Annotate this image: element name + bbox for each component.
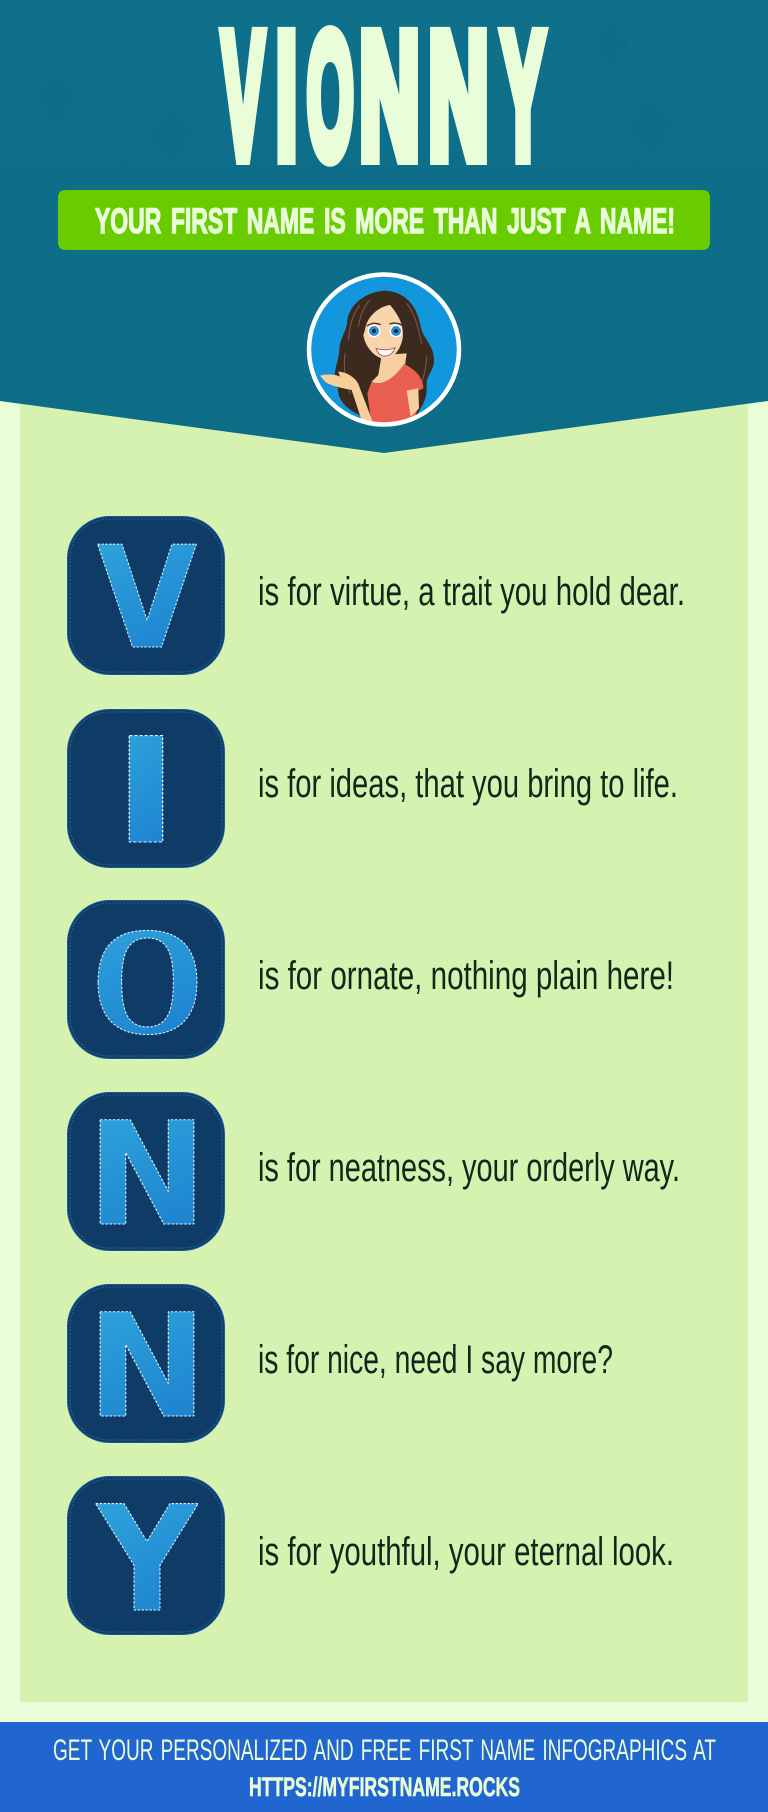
letter tile I <box>68 707 224 877</box>
letter tile Y: Y <box>95 1475 199 1645</box>
row: N second <box>68 1283 613 1450</box>
line text N second: is for nice, need I say more? <box>258 1338 613 1382</box>
portrait: woman in circle <box>309 274 459 425</box>
title: O <box>307 0 354 194</box>
letter tile I: I <box>113 707 179 877</box>
row: Y <box>68 1475 674 1645</box>
row: V <box>68 516 685 681</box>
letter tile V <box>68 516 224 681</box>
row: N <box>68 1091 680 1258</box>
letter tile N second: N <box>87 1283 207 1450</box>
panel: letters background <box>20 380 748 1702</box>
title: N <box>428 0 488 194</box>
infographic page: Y <box>502 0 544 194</box>
title: N <box>360 0 420 194</box>
letter tile N: N <box>87 1091 207 1258</box>
letter tile O: O <box>91 895 204 1067</box>
header banner <box>0 0 768 453</box>
title: I <box>276 0 297 194</box>
letter tile Y <box>68 1475 224 1645</box>
title: V <box>222 0 264 194</box>
footer url: HTTPS://MYFIRSTNAME.ROCKS <box>249 1772 520 1802</box>
letter tile V: V <box>97 517 197 681</box>
row: O <box>68 895 674 1067</box>
footer <box>0 1722 768 1812</box>
tagline banner <box>58 190 710 250</box>
row: I <box>68 707 678 877</box>
